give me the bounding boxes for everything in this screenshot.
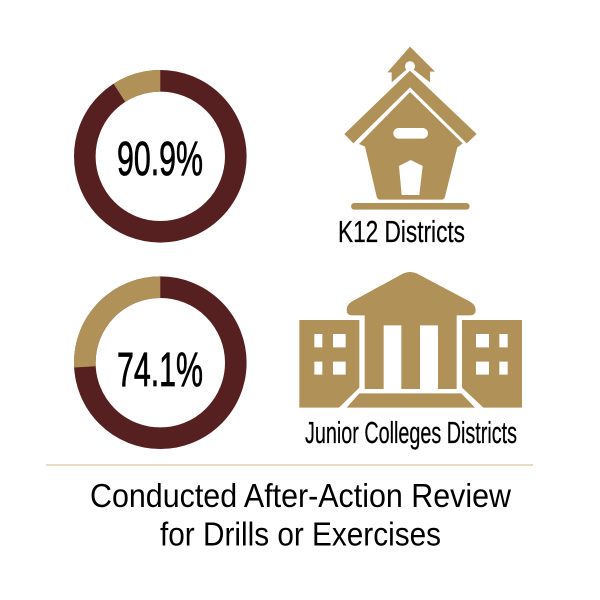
donut chart: junior colleges 74.1%: 74.1% (117, 344, 203, 397)
caption: for Drills or Exercises (160, 516, 441, 552)
caption: Conducted After-Action Review (90, 477, 511, 514)
donut chart: K12 districts 90.9% (85, 81, 236, 232)
icon: schoolhouse (344, 47, 477, 210)
icon: college building (299, 272, 522, 408)
label: K12 Districts: K12 Districts (338, 214, 465, 249)
caption (90, 477, 511, 552)
donut chart: K12 districts 90.9%: 90.9% (117, 133, 203, 186)
donut chart: junior colleges 74.1% (85, 287, 236, 438)
